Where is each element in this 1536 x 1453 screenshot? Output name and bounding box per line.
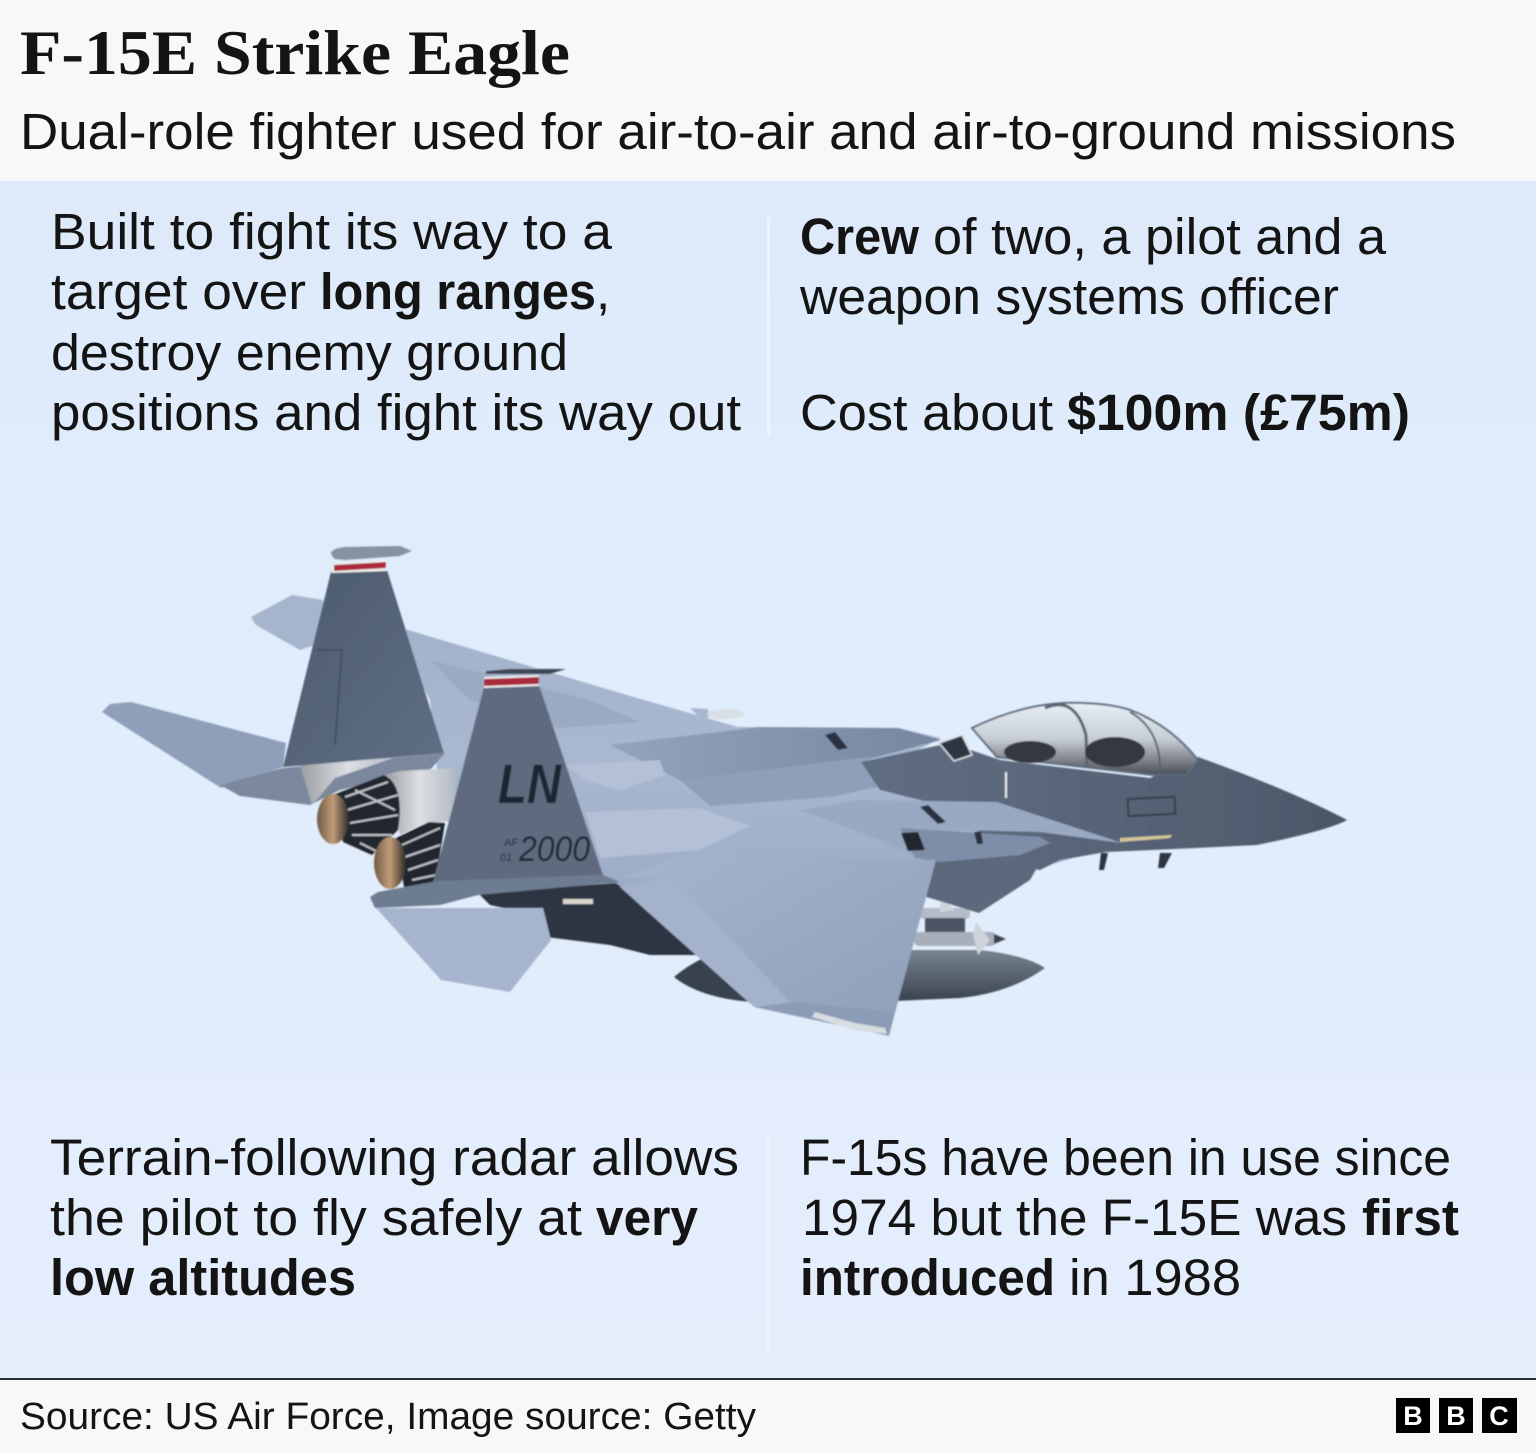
tail code AF 01: AF	[503, 837, 519, 849]
text block: top right, crew and cost: Crew	[800, 208, 919, 265]
text block: top left, role: destroy enemy ground	[51, 324, 568, 381]
text block: bottom left, radar: Terrain-following radar allows	[50, 1129, 739, 1186]
near tail fin	[433, 669, 603, 882]
far wing and upper fuselage	[251, 595, 1122, 890]
text block: top left, role: long ranges	[320, 263, 596, 320]
missiles	[914, 895, 1006, 955]
text block: top left, role	[51, 203, 741, 441]
text block: bottom right, history: first	[1362, 1189, 1459, 1246]
logo: BBC	[1396, 1398, 1517, 1433]
logo: BBC: B	[1446, 1401, 1466, 1431]
text block: bottom right, history: F-15s have been in use since	[800, 1129, 1451, 1186]
far stabilator and boom	[102, 702, 445, 805]
tail number 2000: 2000	[518, 830, 590, 869]
near main wing	[620, 850, 936, 1036]
engines and nozzles	[317, 768, 455, 889]
source line: Source: US Air Force, Image source: Getty	[20, 1396, 756, 1438]
logo: BBC: B	[1403, 1401, 1423, 1431]
logo: BBC: C	[1489, 1401, 1509, 1431]
tail code LN: LN	[498, 752, 562, 815]
strake and glove	[800, 800, 1122, 863]
text block: bottom left, radar: low altitudes	[50, 1249, 356, 1306]
text block: top right, crew and cost: Cost about	[800, 384, 1053, 441]
canopy	[972, 703, 1198, 775]
text block: top left, role: target over	[51, 263, 306, 320]
text block: top right, crew and cost: weapon systems officer	[799, 268, 1339, 325]
near boom	[370, 875, 620, 908]
fuel tank	[674, 950, 1045, 1002]
text block: top right, crew and cost: of two, a pilot and a	[933, 208, 1387, 265]
title: F-15E Strike Eagle	[20, 17, 570, 88]
text block: bottom left, radar	[50, 1129, 739, 1306]
text block: bottom left, radar: the pilot to fly safely at	[50, 1189, 582, 1246]
text block: bottom right, history: 1974 but the F-15E was	[802, 1189, 1347, 1246]
text block: top right, crew and cost	[799, 208, 1410, 441]
text block: bottom right, history: in 1988	[1069, 1249, 1241, 1306]
subtitle: Dual-role fighter used for air-to-air and air-to-ground missions	[20, 103, 1456, 160]
intake vent	[939, 735, 972, 761]
text block: top left, role: ,	[596, 263, 610, 320]
far tail fin	[283, 546, 444, 767]
dark underbody	[478, 883, 710, 955]
text block: bottom right, history: introduced	[800, 1249, 1055, 1306]
image: F-15E jet	[102, 546, 1347, 1036]
near tail fin: 01	[500, 852, 512, 864]
header panel	[0, 0, 1536, 181]
text block: bottom left, radar: very	[596, 1189, 699, 1246]
text block: bottom right, history	[800, 1129, 1459, 1306]
forward fuselage and nose	[861, 743, 1347, 913]
text block: top left, role: positions and fight its way out	[51, 384, 741, 441]
near stabilator	[376, 908, 551, 992]
text block: top left, role: Built to fight its way to a	[51, 203, 613, 260]
footer panel	[0, 1380, 1536, 1453]
text block: top right, crew and cost: $100m (£75m)	[1067, 384, 1410, 441]
